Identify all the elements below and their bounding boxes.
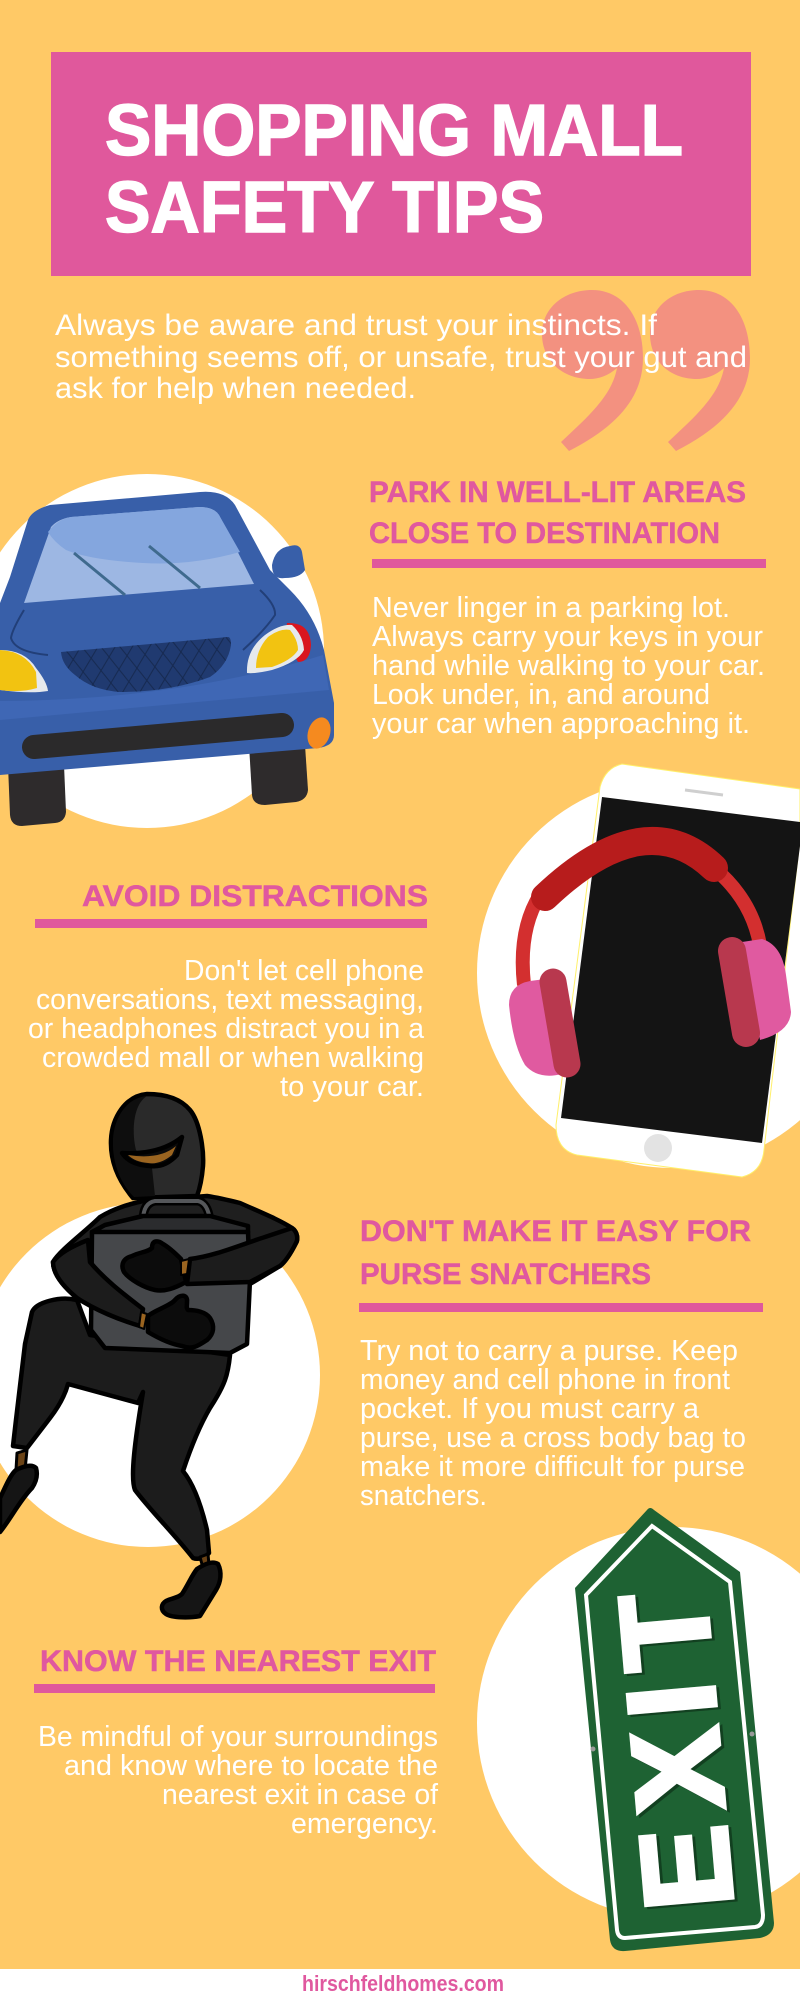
briefcase	[143, 1201, 210, 1221]
lower body highlight	[0, 655, 329, 720]
speaker	[685, 790, 723, 795]
icon: blue car	[0, 492, 334, 826]
text: purse snatchers: make it more difficult for purse	[360, 1451, 745, 1483]
white circle behind car	[0, 474, 324, 828]
upper glove	[122, 1241, 186, 1291]
heading: park: PARK IN WELL-LIT AREAS	[369, 476, 746, 509]
left arm	[53, 1240, 143, 1326]
icon: thief	[0, 1094, 297, 1617]
upper torso and right arm back	[53, 1196, 297, 1300]
text: nearest exit: emergency.	[291, 1808, 438, 1840]
icon: exit sign: EXIT	[592, 1587, 760, 1916]
footer: hirschfeldhomes.com	[302, 1971, 504, 1996]
lower glove	[148, 1296, 213, 1348]
head	[111, 1094, 203, 1198]
title banner	[51, 52, 751, 276]
text: distractions: crowded mall or when walking	[42, 1042, 424, 1074]
icon: exit sign	[575, 1508, 774, 1951]
hood lines	[11, 590, 275, 655]
screen	[561, 797, 800, 1143]
wing mirror	[272, 545, 305, 578]
text: park: Always carry your keys in your	[372, 621, 763, 653]
text: distractions: Don't let cell phone	[184, 955, 424, 987]
intro text: ask for help when needed.	[55, 372, 416, 405]
grille	[61, 637, 231, 692]
text: nearest exit	[38, 1721, 439, 1840]
heading: nearest exit: KNOW THE NEAREST EXIT	[40, 1645, 436, 1678]
exit lettering: EXIT	[595, 1589, 763, 1918]
tires	[8, 745, 308, 826]
car body	[0, 492, 334, 775]
heading: park	[369, 476, 746, 550]
text: distractions: conversations, text messaging,	[36, 984, 424, 1016]
heading: purse snatchers: PURSE SNATCHERS	[360, 1258, 651, 1291]
text: purse snatchers	[360, 1335, 746, 1512]
right headlight	[285, 623, 311, 662]
intro text: Always be aware and trust your instincts. If	[55, 309, 658, 342]
text: purse snatchers: Try not to carry a purse. Keep	[360, 1335, 738, 1367]
icon: headphones	[509, 841, 791, 1076]
icon: phone	[556, 764, 800, 1177]
text: park: hand while walking to your car.	[372, 650, 765, 682]
legs	[13, 1299, 230, 1559]
white circle behind thief	[0, 1203, 320, 1547]
home button	[644, 1134, 672, 1162]
text: nearest exit: Be mindful of your surroundings	[38, 1721, 438, 1753]
intro text: something seems off, or unsafe, trust your gut and	[55, 341, 747, 374]
heading: purse snatchers: DON'T MAKE IT EASY FOR	[360, 1215, 751, 1248]
wipers	[74, 546, 200, 595]
text: distractions	[28, 955, 425, 1103]
white circle behind exit sign	[477, 1527, 800, 1919]
windscreen	[24, 507, 254, 603]
intro text	[55, 309, 747, 405]
footer	[0, 1969, 800, 2000]
text: nearest exit: nearest exit in case of	[162, 1779, 439, 1811]
title banner: SAFETY TIPS	[105, 168, 544, 248]
white circle behind phone	[477, 778, 800, 1168]
text: distractions: or headphones distract you in a	[28, 1013, 425, 1045]
left ear cup	[509, 978, 562, 1076]
text: nearest exit: and know where to locate the	[64, 1750, 438, 1782]
text: purse snatchers: money and cell phone in front	[360, 1364, 730, 1396]
left headlight	[0, 650, 48, 692]
icon: quotation marks	[542, 290, 750, 451]
heading: distractions: AVOID DISTRACTIONS	[82, 880, 428, 913]
heading: purse snatchers	[360, 1215, 751, 1291]
right ear cup	[742, 939, 791, 1040]
text: distractions: to your car.	[280, 1071, 424, 1103]
screws	[590, 1746, 596, 1752]
text: park	[372, 592, 765, 740]
heading: park: CLOSE TO DESTINATION	[369, 517, 720, 550]
text: park: your car when approaching it.	[372, 708, 750, 740]
right arm	[187, 1228, 297, 1284]
bumper bar	[34, 725, 282, 747]
text: park: Never linger in a parking lot.	[372, 592, 730, 624]
text: purse snatchers: purse, use a cross body bag to	[360, 1422, 746, 1454]
title banner: SHOPPING MALL	[105, 91, 683, 171]
text: purse snatchers: snatchers.	[360, 1480, 487, 1512]
text: park: Look under, in, and around	[372, 679, 710, 711]
shoes	[16, 1450, 27, 1470]
text: purse snatchers: pocket. If you must carry a	[360, 1393, 700, 1425]
indicator	[304, 714, 334, 752]
